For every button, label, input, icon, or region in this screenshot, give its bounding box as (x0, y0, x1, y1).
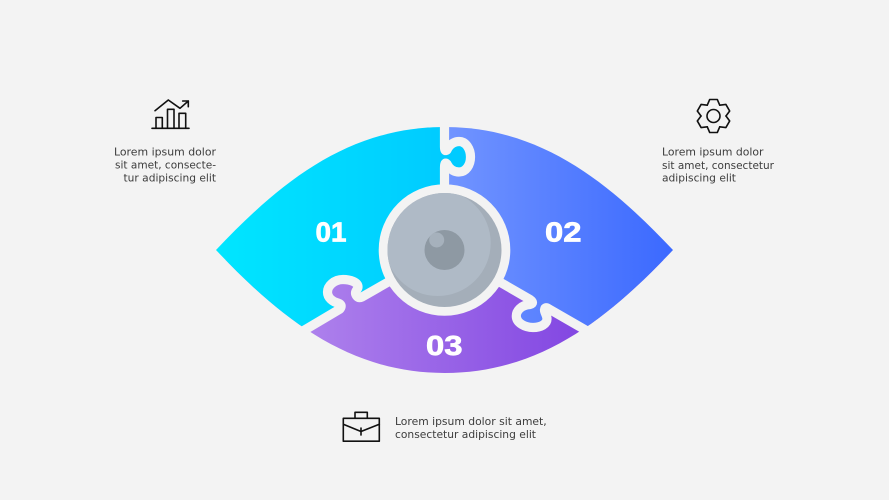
text block: left: Lorem ipsum dolor (114, 147, 217, 159)
text block: left (114, 147, 217, 184)
text block: right: adipiscing elit (662, 173, 736, 185)
text block: right (662, 147, 775, 185)
eyeball (379, 184, 510, 316)
top separator with tab (444, 118, 470, 195)
piece 01: cyan (216, 127, 466, 326)
pupil highlight (429, 232, 444, 248)
separators between pieces (296, 118, 594, 335)
piece 02: blue (449, 127, 673, 326)
left separator with tab (296, 278, 396, 335)
number 02: 02 (545, 216, 582, 248)
number 01: 01 (316, 216, 346, 248)
text block: right: Lorem ipsum dolor (662, 147, 764, 159)
number 03: 03 (426, 330, 462, 361)
icon: briefcase (343, 412, 379, 441)
eyeball shadow (388, 193, 502, 307)
icon: bar chart with rising arrow (152, 100, 189, 128)
puzzle pieces (216, 127, 673, 373)
eye puzzle diagram (216, 127, 673, 373)
eyeball ring (379, 184, 510, 316)
eyeball light area (385, 190, 491, 296)
right separator with tab (493, 278, 594, 335)
text block: left: tur adipiscing elit (124, 172, 216, 184)
text block: left: sit amet, consecte- (115, 160, 216, 172)
text block: bottom (395, 416, 547, 441)
piece 03: purple (226, 260, 664, 373)
text block: bottom: consectetur adipiscing elit (395, 429, 536, 441)
icon: gear (696, 100, 731, 132)
text block: right: sit amet, consectetur (662, 160, 775, 172)
pupil (424, 230, 464, 270)
text block: bottom: Lorem ipsum dolor sit amet, (395, 416, 547, 428)
